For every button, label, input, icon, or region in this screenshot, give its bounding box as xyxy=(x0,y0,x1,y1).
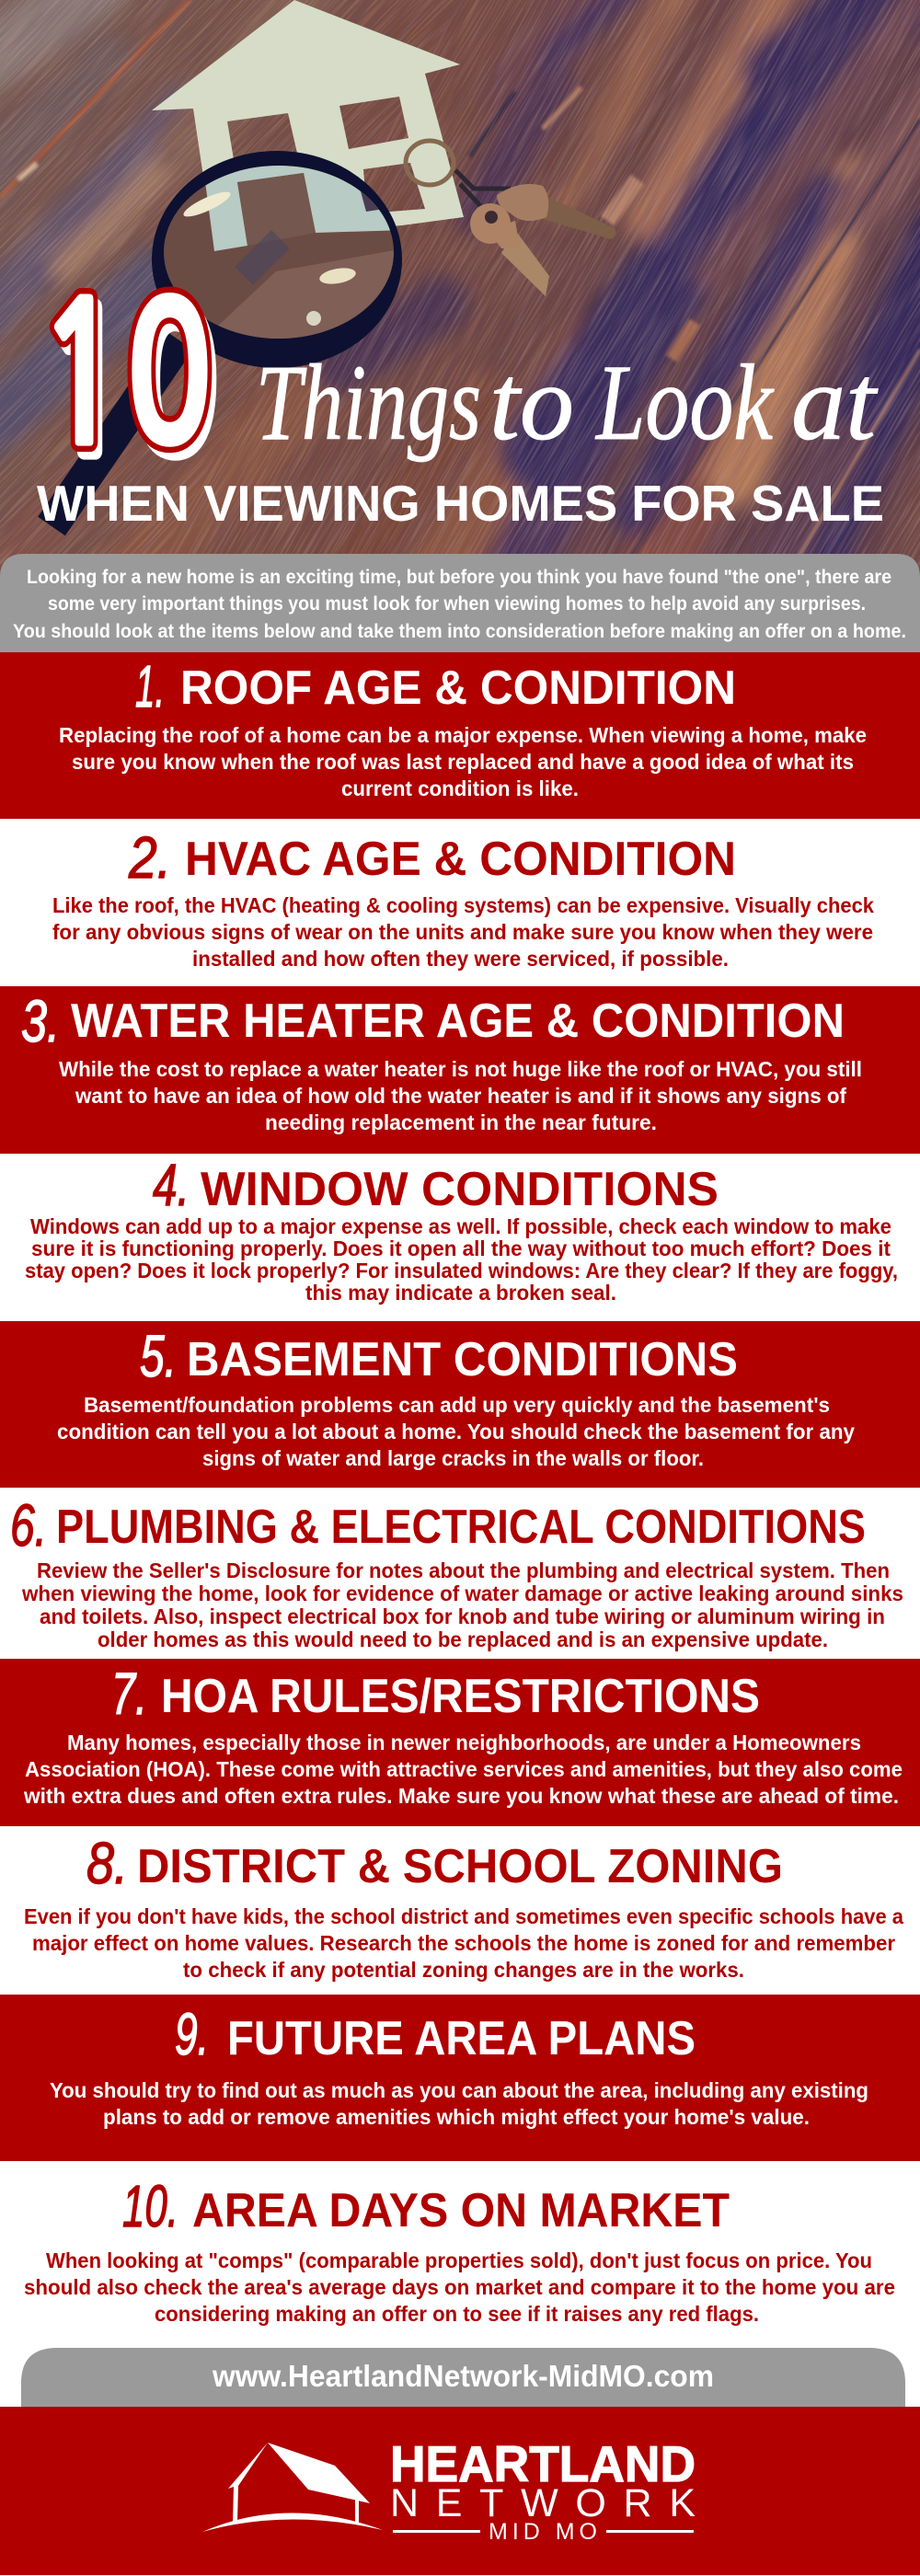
panel: 2 hvac age and condition xyxy=(0,819,920,986)
logo wordmark xyxy=(390,2435,696,2545)
panel: 3 water heater age and condition: WATER HEATER AGE & CONDITION xyxy=(71,995,845,1048)
panel: 9 future area plans: 9. xyxy=(175,2001,209,2067)
panel: 5 basement conditions: Basement/foundation problems can add up very quickly and the basement's xyxy=(84,1393,830,1417)
panel: 2 hvac age and condition: 2. xyxy=(128,824,171,891)
panel: 6 plumbing and electrical conditions xyxy=(0,1488,920,1659)
panel: introduction xyxy=(0,554,920,652)
panel: 3 water heater age and condition xyxy=(0,986,920,1154)
panel: 5 basement conditions: 5. xyxy=(140,1323,177,1389)
panel: website address bar: www.HeartlandNetwork-MidMO.com xyxy=(212,2359,714,2393)
panel: 8 district and school zoning: major effect on home values. Research the schools the home is zoned for and remember xyxy=(32,1931,895,1955)
hero photo: wood floor xyxy=(0,0,920,577)
panel: 10 area days on market: When looking at "comps" (comparable properties sold), don't just focus on price. You xyxy=(46,2248,872,2272)
panel: 7 hoa rules and restrictions: Association (HOA). These come with attractive services and amenities, but they also come xyxy=(25,1757,903,1781)
panel: 5 basement conditions: BASEMENT CONDITIONS xyxy=(187,1333,738,1386)
heading: big number 10: 10 xyxy=(37,280,213,473)
panel: 7 hoa rules and restrictions: with extra dues and often extra rules. Make sure you know what these are ahead of time. xyxy=(23,1784,899,1808)
panel: 10 area days on market xyxy=(0,2161,920,2348)
panel: 4 window conditions: this may indicate a broken seal. xyxy=(305,1281,616,1305)
panel: 8 district and school zoning: to check if any potential zoning changes are in the works. xyxy=(183,1958,744,1982)
panel: 2 hvac age and condition: HVAC AGE & CONDITION xyxy=(185,833,736,886)
panel: 9 future area plans: You should try to find out as much as you can about the area, including any existing xyxy=(50,2078,868,2102)
panel: 1 roof age and condition: ROOF AGE & CONDITION xyxy=(180,661,736,715)
panel: 1 roof age and condition: Replacing the roof of a home can be a major expense. When viewing a home, make xyxy=(59,723,867,747)
panel: 5 basement conditions xyxy=(0,1321,920,1488)
panel: 2 hvac age and condition: Like the roof, the HVAC (heating & cooling systems) can be expensive. Visually check xyxy=(52,893,874,917)
panel: 7 hoa rules and restrictions: HOA RULES/RESTRICTIONS xyxy=(161,1670,760,1723)
panel: 6 plumbing and electrical conditions: Review the Seller's Disclosure for notes about the plumbing and electrical system. Then xyxy=(37,1558,890,1582)
panel: 7 hoa rules and restrictions: Many homes, especially those in newer neighborhoods, are under a Homeowners xyxy=(67,1731,861,1754)
icon: keys on a ring xyxy=(406,141,615,296)
heading: big number 10: 10 xyxy=(42,289,219,482)
panel: 8 district and school zoning: Even if you don't have kids, the school district and sometimes even specific schools have a xyxy=(24,1904,903,1928)
panel: footer xyxy=(0,2407,920,2575)
panel: 9 future area plans: FUTURE AREA PLANS xyxy=(227,2012,696,2065)
panel: 1 roof age and condition: 1. xyxy=(135,653,165,719)
panel: 10 area days on market: considering making an offer on to see if it raises any red flags. xyxy=(155,2302,759,2326)
heading: when viewing homes for sale: WHEN VIEWING HOMES FOR SALE xyxy=(37,475,884,532)
icon: magnifying glass xyxy=(152,151,405,368)
panel: 4 window conditions: sure it is functioning properly. Does it open all the way without too much effort? Does it xyxy=(31,1236,891,1260)
panel: 8 district and school zoning: DISTRICT & SCHOOL ZONING xyxy=(137,1840,783,1893)
panel: 2 hvac age and condition: installed and how often they were serviced, if possible. xyxy=(192,947,729,971)
panel: 5 basement conditions: condition can tell you a lot about a home. You should check the basement for any xyxy=(57,1420,855,1443)
panel: 6 plumbing and electrical conditions: older homes as this would need to be replaced and is an expensive update. xyxy=(98,1627,828,1651)
logo wordmark: NETWORK xyxy=(390,2481,696,2525)
panel: 10 area days on market: 10. xyxy=(122,2173,178,2239)
panel: 5 basement conditions: signs of water and large cracks in the walls or floor. xyxy=(202,1446,704,1470)
panel: introduction: some very important things you must look for when viewing homes to help avoid any surprises. xyxy=(48,593,866,615)
panel: 6 plumbing and electrical conditions: 6. xyxy=(10,1492,47,1558)
panel: 3 water heater age and condition: While the cost to replace a water heater is not huge like the roof or HVAC, you still xyxy=(59,1057,862,1081)
panel: 9 future area plans: plans to add or remove amenities which might effect your home's value. xyxy=(103,2105,810,2129)
icon: logo house xyxy=(202,2443,383,2532)
panel: 4 window conditions: stay open? Does it lock properly? For insulated windows: Are they clear? If they are foggy, xyxy=(25,1259,898,1282)
logo wordmark: MID MO xyxy=(489,2519,597,2545)
panel: 4 window conditions xyxy=(0,1152,920,1321)
heading: script title line: to xyxy=(489,342,574,463)
heading: big number 10: 10 xyxy=(37,280,213,473)
panel: 3 water heater age and condition: needing replacement in the near future. xyxy=(265,1110,657,1134)
panel: 4 window conditions: WINDOW CONDITIONS xyxy=(201,1163,719,1216)
panel: 6 plumbing and electrical conditions: and toilets. Also, inspect electrical box for knob and tube wiring or aluminum wiring in xyxy=(40,1604,885,1628)
icon: magnifying glass handle xyxy=(52,340,179,526)
heading: script title line: at xyxy=(791,342,879,463)
panel: 1 roof age and condition: current condition is like. xyxy=(341,776,579,800)
panel: 7 hoa rules and restrictions: 7. xyxy=(111,1661,147,1727)
icon: paper house cut-out xyxy=(152,0,464,251)
panel: 4 window conditions: 4. xyxy=(153,1152,190,1218)
panel: 10 area days on market: AREA DAYS ON MARKET xyxy=(192,2184,730,2237)
panel: 6 plumbing and electrical conditions: when viewing the home, look for evidence of water damage or active leaking around sinks xyxy=(21,1581,903,1605)
panel: 1 roof age and condition: sure you know when the roof was last replaced and have a good idea of what its xyxy=(72,750,854,774)
heading: script title line: Look xyxy=(594,342,775,463)
panel: 1 roof age and condition xyxy=(0,652,920,819)
panel: 7 hoa rules and restrictions xyxy=(0,1659,920,1826)
panel: 4 window conditions: Windows can add up to a major expense as well. If possible, check each window to make xyxy=(30,1214,891,1238)
panel: 3 water heater age and condition: want to have an idea of how old the water heater is and if it shows any signs of xyxy=(75,1084,846,1108)
panel: 9 future area plans xyxy=(0,1995,920,2161)
panel: 3 water heater age and condition: 3. xyxy=(21,988,60,1054)
panel: 8 district and school zoning: 8. xyxy=(86,1830,128,1896)
heading: script title line xyxy=(256,342,879,463)
panel: website address bar xyxy=(21,2348,905,2407)
panel: 10 area days on market: should also check the area's average days on market and compare it to the home you are xyxy=(24,2275,895,2299)
heading: script title line: Things xyxy=(256,342,481,463)
panel: 8 district and school zoning xyxy=(0,1826,920,1995)
logo wordmark: HEARTLAND xyxy=(390,2435,696,2492)
panel: 2 hvac age and condition: for any obvious signs of wear on the units and make sure you know when they were xyxy=(52,920,873,944)
